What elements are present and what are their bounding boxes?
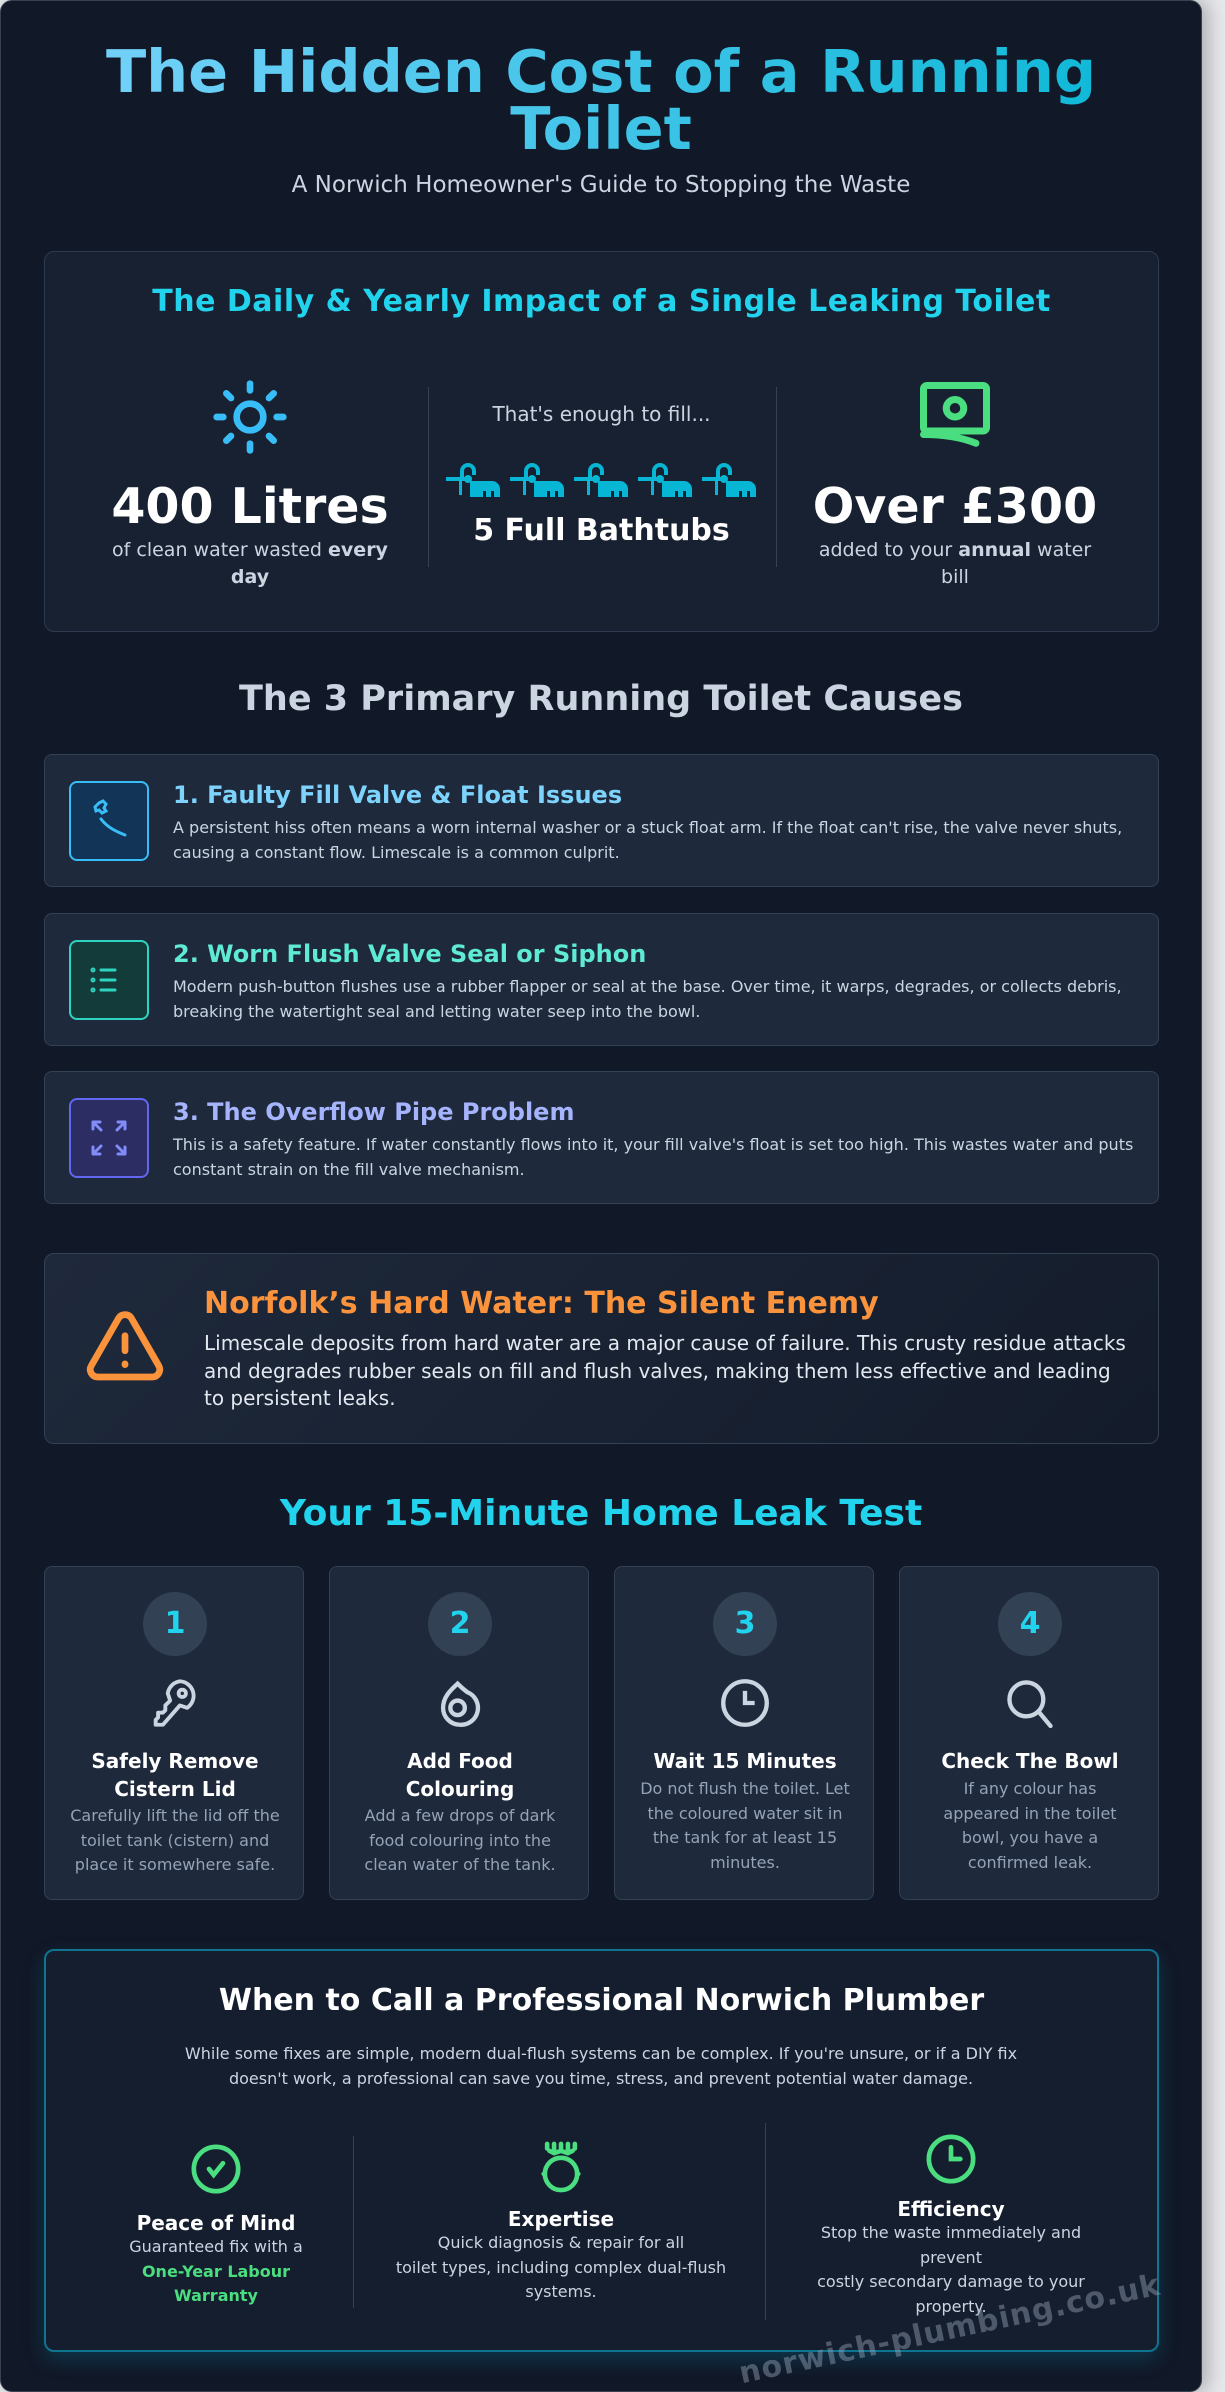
causes heading: The 3 Primary Running Toilet Causes <box>239 679 963 719</box>
icon: money <box>920 382 990 447</box>
benefit: peace of mind: Guaranteed fix with a One-Year Labour Warranty <box>129 2237 303 2305</box>
cause 2 text: Modern push-button flushes use a rubber flapper or seal at the base. Over time, it warps, degrades, or collects debris, breaking the watertight seal and letting water seep into the bowl. <box>173 977 1122 1021</box>
benefit: efficiency: Efficiency <box>897 2197 1005 2221</box>
benefit: efficiency: costly secondary damage to your property. <box>817 2272 1085 2316</box>
step 4: Check The Bowl <box>941 1749 1119 1773</box>
title: The Hidden Cost of a Running <box>106 37 1096 106</box>
cause 1 text: A persistent hiss often means a worn internal washer or a stuck float arm. If the float can't rise, the valve never shuts, causing a constant flow. Limescale is a common culprit. <box>173 818 1122 862</box>
cause 1 title: 1. Faulty Fill Valve & Float Issues <box>173 781 622 809</box>
benefit: expertise: Expertise <box>508 2207 614 2231</box>
icon: drop <box>440 1680 480 1727</box>
benefit: expertise <box>396 2142 726 2301</box>
hard water text: Limescale deposits from hard water are a major cause of failure. This crusty residue attacks and degrades rubber seals on fill and flush valves, making them less effective and leading to persistent leaks. <box>204 1331 1126 1410</box>
stat: litres: 400 Litres <box>111 478 389 535</box>
step 2: Add a few drops of dark food colouring into the clean water of the tank. <box>364 1806 556 1874</box>
icon: search <box>1007 1680 1053 1728</box>
benefit: peace of mind <box>129 2144 303 2305</box>
icon: valve <box>69 781 149 861</box>
cause 2 title: 2. Worn Flush Valve Seal or Siphon <box>173 940 646 968</box>
icon: clock <box>721 1679 769 1727</box>
step 1: 1 <box>165 1606 185 1641</box>
leak test heading: Your 15-Minute Home Leak Test <box>280 1493 922 1534</box>
title <box>1 43 1201 157</box>
stat: litres: of clean water wasted every day <box>112 539 388 588</box>
panel: impact <box>44 251 1159 632</box>
icon: key <box>154 1679 196 1727</box>
step 2: Add Food Colouring <box>406 1749 514 1801</box>
icon: sun <box>213 380 287 454</box>
cause 3 text: This is a safety feature. If water constantly flows into it, your fill valve's float is set too high. This wastes water and puts constant strain on the fill valve mechanism. <box>173 1135 1133 1179</box>
icon: arrows <box>69 1098 149 1178</box>
benefit: efficiency: Stop the waste immediately and prevent <box>821 2223 1081 2266</box>
stat: bathtubs: That's enough to fill... <box>492 402 711 426</box>
step 4: 4 <box>1020 1606 1040 1641</box>
pro heading: When to Call a Professional Norwich Plumber <box>219 1983 984 2018</box>
impact heading: The Daily & Yearly Impact of a Single Leaking Toilet <box>152 284 1051 319</box>
panel: hard water <box>44 1253 1159 1444</box>
pro text: While some fixes are simple, modern dual-flush systems can be complex. If you're unsure, or if a DIY fix doesn't work, a professional can save you time, stress, and prevent potential water damage. <box>185 2044 1017 2088</box>
icon: warning <box>86 1311 164 1380</box>
stat: bathtubs <box>446 402 756 548</box>
watermark: norwich-plumbing.co.uk <box>736 2268 1164 2391</box>
benefit: expertise: toilet types, including complex dual-flush systems. <box>396 2258 726 2301</box>
stat: cost <box>813 382 1097 588</box>
stat: bathtubs: 5 Full Bathtubs <box>473 513 730 548</box>
hard water title: Norfolk’s Hard Water: The Silent Enemy <box>204 1286 879 1321</box>
benefit: expertise: Quick diagnosis & repair for all <box>438 2233 684 2252</box>
step 2 <box>329 1566 589 1900</box>
panel: cause 1 <box>44 754 1159 887</box>
step 1 <box>44 1566 304 1900</box>
step 3 <box>614 1566 874 1900</box>
step 4: If any colour has appeared in the toilet bowl, you have a confirmed leak. <box>943 1779 1117 1872</box>
step 1: Safely Remove Cistern Lid <box>91 1749 259 1801</box>
benefit: peace of mind: Peace of Mind <box>137 2211 295 2235</box>
icon: bathtubs <box>446 463 756 497</box>
panel: cause 2 <box>44 913 1159 1046</box>
icon: list <box>69 940 149 1020</box>
step 3: Do not flush the toilet. Let the coloured water sit in the tank for at least 15 minutes. <box>640 1779 850 1872</box>
benefit: efficiency <box>817 2134 1085 2316</box>
step 1: Carefully lift the lid off the toilet tank (cistern) and place it somewhere safe. <box>70 1806 280 1874</box>
stat: cost: added to your annual water bill <box>819 539 1091 588</box>
cause 3 title: 3. The Overflow Pipe Problem <box>173 1098 574 1126</box>
step 3: Wait 15 Minutes <box>653 1749 837 1773</box>
stat: cost: Over £300 <box>813 478 1097 535</box>
panel: professional <box>44 1949 1159 2352</box>
step 3: 3 <box>735 1606 755 1641</box>
title: Toilet <box>510 94 692 163</box>
step 4 <box>899 1566 1159 1900</box>
panel: cause 3 <box>44 1071 1159 1204</box>
stat: litres <box>111 380 389 588</box>
step 2: 2 <box>450 1606 470 1641</box>
subtitle: A Norwich Homeowner's Guide to Stopping the Waste <box>292 172 910 198</box>
